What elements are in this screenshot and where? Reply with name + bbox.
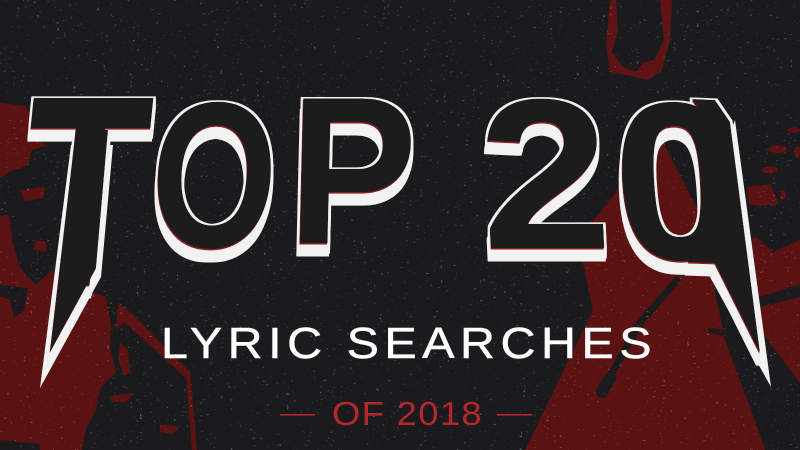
digit 0 with tail: 0 <box>606 56 749 307</box>
glyphs with extruded edge <box>7 40 760 353</box>
right dash <box>497 414 532 416</box>
dark streak across right triangle <box>602 280 732 392</box>
tail of 0 <box>690 120 771 387</box>
dark marks in top splatter <box>612 0 664 72</box>
red splatter: left <box>0 103 197 450</box>
title: TOP 20 <box>7 40 771 388</box>
year: OF 2018 <box>332 396 482 433</box>
left dash <box>280 414 315 416</box>
red splatter: right triangle <box>525 118 800 450</box>
letter P: P <box>286 53 420 288</box>
spike of T <box>40 145 113 388</box>
red splatter: top <box>606 0 672 80</box>
subtitle: LYRIC SEARCHES <box>161 318 652 368</box>
letter T: T <box>7 40 161 344</box>
dark marks over left splatter <box>0 285 40 450</box>
letter O: O <box>146 59 283 292</box>
digit 2: 2 <box>474 54 616 294</box>
